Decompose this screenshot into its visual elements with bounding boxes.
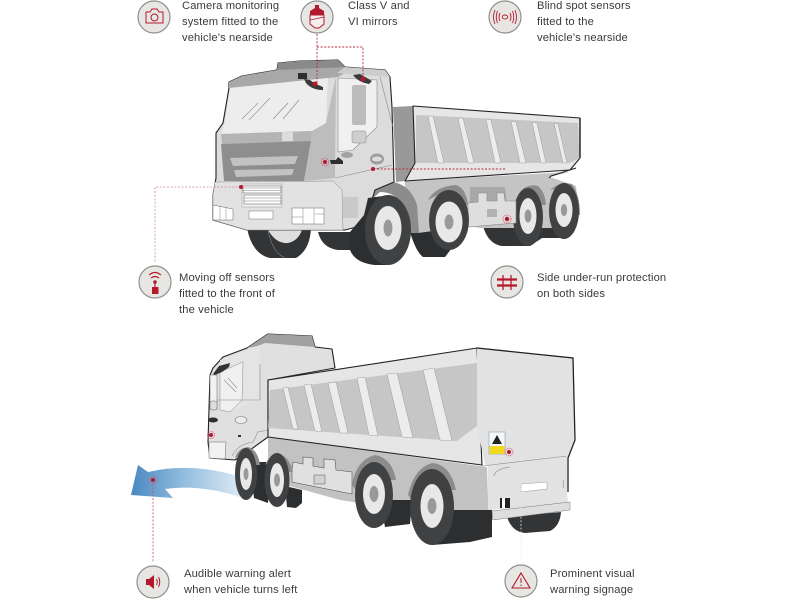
door handle [235, 416, 247, 424]
wheel 2, rear view [264, 453, 290, 507]
far rear wheels [507, 512, 561, 533]
arches [235, 447, 456, 500]
icon: speaker [137, 566, 169, 598]
text: moving off sensors: the vehicle [179, 304, 234, 316]
text: audible warning: when vehicle turns left [183, 584, 298, 596]
windscreen [221, 78, 328, 134]
cab corner panel [304, 76, 336, 181]
text: warning signage: warning signage [549, 584, 633, 596]
wheel treads [250, 462, 492, 545]
front pillar [210, 375, 217, 409]
side mirror [353, 74, 372, 84]
icon: camera [138, 1, 170, 33]
truck: front three-quarter view [212, 60, 582, 266]
wheel 3, rear view [355, 462, 393, 528]
wheel 3 [513, 188, 543, 246]
rear wheel treads [410, 224, 570, 257]
wheel 2 [429, 190, 469, 250]
text: mirrors: Class V and [348, 0, 410, 12]
far-side front wheels [247, 228, 350, 258]
wheel 4, rear view [410, 469, 454, 545]
icon: blind spot sensor [489, 1, 521, 33]
text: camera monitoring: Camera monitoring [182, 0, 279, 12]
text: warning signage: Prominent visual [550, 568, 635, 580]
chassis box [470, 187, 507, 206]
text: side under-run protection: Side under-run protection [537, 272, 666, 284]
side under-run protection guard [468, 193, 516, 227]
wheel 1 arch [358, 182, 419, 233]
guard, side under-run protection [292, 457, 352, 494]
arrow: left turn [131, 465, 240, 498]
door window [335, 77, 393, 178]
cab [213, 60, 394, 230]
roof [229, 60, 345, 88]
wheel arches [428, 183, 580, 215]
front light [209, 442, 226, 459]
bumper [213, 181, 358, 230]
icon: mirror [301, 1, 333, 33]
front grille [221, 131, 312, 181]
text: side under-run protection: on both sides [537, 288, 605, 300]
tipper side [268, 348, 482, 465]
rear wheel 4 [549, 183, 579, 239]
text: camera monitoring: system fitted to the [182, 16, 278, 28]
warning sign [489, 432, 505, 454]
icon: side under-run [491, 266, 523, 298]
icon: moving off sensor [139, 266, 171, 298]
number plate [521, 482, 547, 492]
icon: warning triangle [505, 565, 537, 597]
wheel 1 [350, 195, 411, 265]
text: camera monitoring: vehicle’s nearside [182, 32, 273, 44]
text: moving off sensors: Moving off sensors [179, 272, 275, 284]
text: blind spot sensors: fitted to the [537, 16, 594, 28]
wing mirror [208, 418, 218, 422]
wing mirror [330, 157, 343, 164]
text: audible warning: Audible warning alert [184, 568, 292, 580]
front mirror [298, 73, 323, 90]
cab [208, 334, 335, 460]
chassis [405, 172, 579, 233]
callout lines and markers [149, 34, 521, 562]
mirror [213, 363, 230, 375]
cab window [220, 362, 243, 412]
text: moving off sensors: fitted to the front of [179, 288, 276, 300]
chassis [268, 437, 495, 520]
text: mirrors: VI mirrors [348, 16, 398, 28]
truck: rear three-quarter view [208, 333, 576, 545]
text: blind spot sensors: Blind spot sensors [537, 0, 631, 12]
rear panel [477, 348, 575, 520]
text: blind spot sensors: vehicle’s nearside [537, 32, 628, 44]
tipper body [393, 106, 580, 182]
wheel 1, rear view [235, 448, 257, 500]
